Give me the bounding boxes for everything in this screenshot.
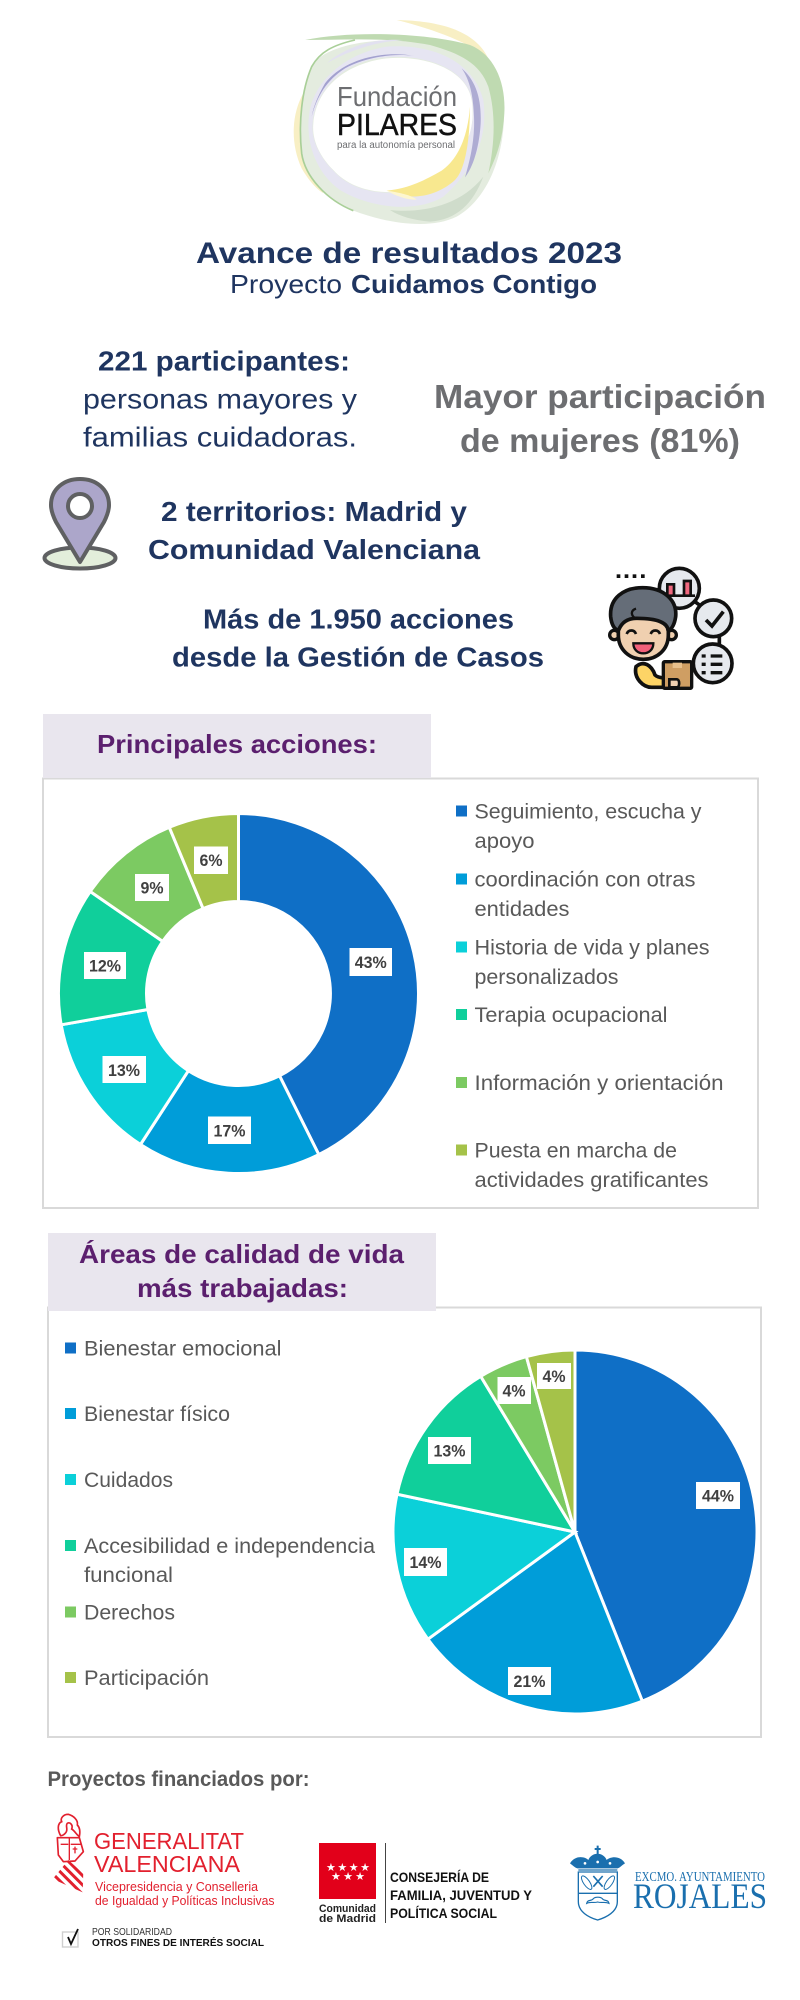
subtitle: Cuidamos Contigo (351, 269, 597, 299)
heading: areas de calidad de vida (48, 1233, 436, 1311)
donut legend (456, 800, 724, 1192)
donut legend: Puesta en marcha de (474, 1140, 677, 1162)
pie data labels: 13% (434, 1442, 466, 1460)
text block: women participation: Mayor participación (434, 378, 766, 415)
callout: otros fines de interes social (62, 1927, 264, 1949)
panel: areas de calidad de vida (48, 1233, 761, 1737)
pie data labels (404, 1363, 740, 1695)
subtitle (230, 269, 597, 299)
pie data labels: 21% (514, 1672, 546, 1691)
title: Avance de resultados 2023 (196, 237, 622, 270)
donut data labels: 43% (355, 953, 387, 972)
icon: location pin (44, 479, 116, 568)
panel: principales acciones (43, 714, 758, 1208)
logo: Fundación Pilares: Fundación (337, 81, 457, 112)
logo: Fundación Pilares: para la autonomía personal (337, 140, 455, 151)
donut legend: Información y orientación (474, 1072, 724, 1095)
heading: principales acciones (43, 714, 431, 778)
logo: Generalitat Valenciana: de Igualdad y Políticas Inclusivas (95, 1893, 275, 1908)
text block: participants: familias cuidadoras. (83, 422, 357, 452)
logo: Comunidad de Madrid: ★★★ (331, 1870, 365, 1883)
text block: women participation: de mujeres (81%) (460, 422, 740, 459)
donut legend: coordinación con otras (474, 868, 696, 892)
icon: Generalitat emblem (54, 1814, 84, 1892)
logo: Comunidad de Madrid: de Madrid (319, 1913, 376, 1925)
donut legend: entidades (474, 898, 570, 921)
pie legend: Derechos (84, 1602, 175, 1624)
footer heading: Proyectos financiados por: (48, 1768, 310, 1791)
heading: areas de calidad de vida: Áreas de calidad de vida (79, 1239, 405, 1269)
text block: actions (172, 604, 544, 672)
text block: participants: 221 participantes: (98, 346, 350, 376)
logo: Ayuntamiento de Rojales (570, 1846, 767, 1920)
subtitle: Proyecto (230, 269, 342, 299)
pie data labels: 4% (502, 1382, 526, 1400)
pie legend: Bienestar emocional (84, 1338, 282, 1360)
text block: actions: Más de 1.950 acciones (203, 604, 514, 634)
logo: Generalitat Valenciana: VALENCIANA (94, 1851, 241, 1877)
donut data labels: 17% (214, 1122, 246, 1140)
pie legend: Accesibilidad e independencia (84, 1535, 375, 1558)
text block: territories: 2 territorios: Madrid y (161, 496, 467, 527)
donut chart (58, 813, 419, 1174)
donut legend: actividades gratificantes (474, 1169, 708, 1192)
text block: territories: Comunidad Valenciana (148, 534, 480, 565)
donut data labels: 9% (140, 878, 164, 898)
text block: women participation (434, 378, 766, 459)
logo: Ayuntamiento de Rojales: EXCMO. AYUNTAMIENTO (635, 1869, 765, 1884)
text block: territories (148, 496, 480, 565)
logo: Comunidad de Madrid: POLÍTICA SOCIAL (390, 1905, 497, 1921)
pie data labels: 44% (702, 1486, 734, 1506)
text block: participants: personas mayores y (83, 384, 357, 414)
logo: Comunidad de Madrid (319, 1843, 533, 1925)
callout: otros fines de interes social: OTROS FINES DE INTERÉS SOCIAL (92, 1936, 264, 1949)
pie legend: funcional (84, 1564, 173, 1587)
logo: Comunidad de Madrid: CONSEJERÍA DE (390, 1869, 489, 1885)
text block: participants (83, 346, 357, 452)
pie chart (393, 1350, 757, 1714)
logo: Comunidad de Madrid: FAMILIA, JUVENTUD Y (390, 1887, 533, 1903)
logo: Fundación Pilares: PILARES (337, 107, 457, 142)
text block: actions: desde la Gestión de Casos (172, 642, 544, 672)
pie legend: Bienestar físico (84, 1403, 230, 1426)
pie legend: Participación (84, 1667, 209, 1690)
donut data labels: 13% (108, 1061, 140, 1080)
donut legend: Seguimiento, escucha y (474, 800, 702, 824)
logo: Comunidad de Madrid: ★★★★ (326, 1861, 370, 1874)
pie data labels: 4% (542, 1367, 566, 1386)
donut legend: Historia de vida y planes (474, 936, 710, 960)
donut data labels: 12% (89, 956, 121, 976)
logo: Generalitat Valenciana: GENERALITAT (94, 1828, 244, 1854)
heading: areas de calidad de vida: más trabajadas: (137, 1273, 348, 1303)
logo: Comunidad de Madrid: Comunidad (319, 1903, 376, 1915)
pie legend: Cuidados (84, 1469, 173, 1492)
heading: principales acciones: Principales acciones: (97, 729, 377, 759)
donut data labels: 6% (200, 851, 222, 870)
donut data labels (84, 846, 392, 1144)
donut legend: apoyo (474, 830, 534, 853)
logo: Ayuntamiento de Rojales: ROJALES (633, 1876, 767, 1916)
donut legend: personalizados (474, 966, 618, 989)
donut legend: Terapia ocupacional (474, 1004, 668, 1027)
pie legend (65, 1338, 375, 1690)
logo: Generalitat Valenciana (41, 1814, 275, 1908)
icon: case manager person (610, 568, 732, 688)
logo: Generalitat Valenciana: Vicepresidencia y Conselleria (95, 1879, 259, 1894)
pie data labels: 14% (410, 1553, 442, 1572)
callout: otros fines de interes social: POR SOLIDARIDAD (92, 1927, 172, 1938)
logo: Fundación Pilares (294, 20, 504, 224)
icon: Rojales coat of arms (570, 1846, 625, 1920)
